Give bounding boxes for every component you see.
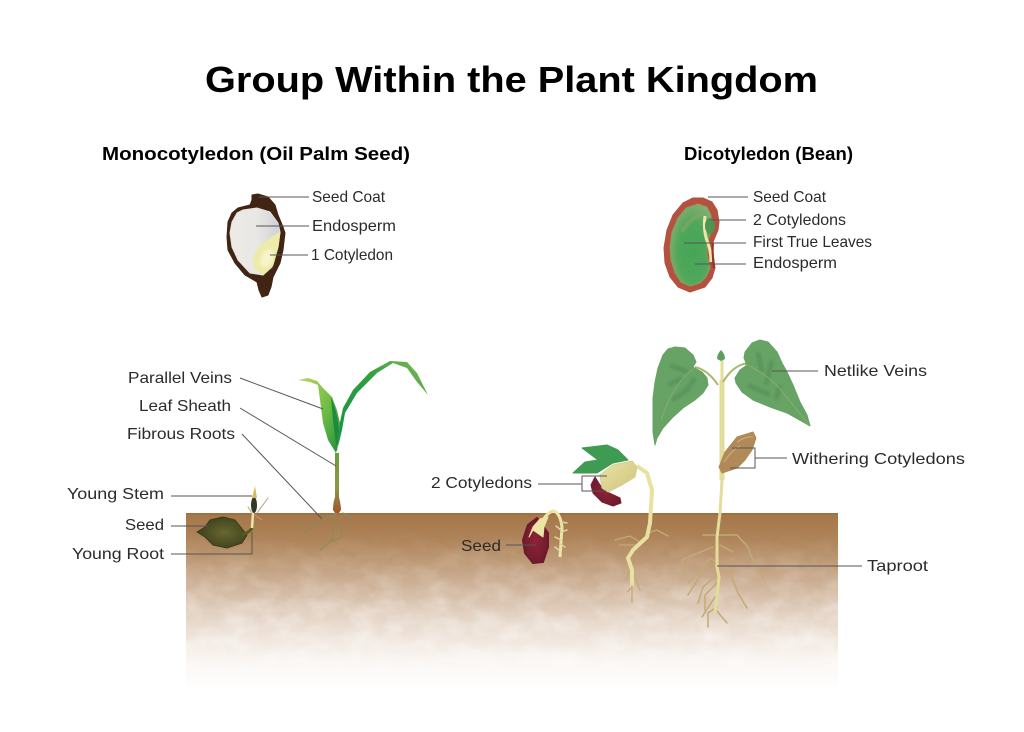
heading: monocotyledon: Monocotyledon (Oil Palm Seed) (102, 144, 410, 164)
labels: bean seed (684, 189, 872, 272)
labels: monocot seedling: Parallel Veins (128, 370, 232, 387)
labels: monocot germinating seed: Seed (125, 517, 164, 534)
labels: bean seed: Endosperm (753, 255, 837, 272)
icon: oil palm seed cross-section (227, 194, 285, 297)
labels: oil palm seed: Seed Coat (312, 189, 386, 206)
labels: monocot seedling: Leaf Sheath (139, 398, 231, 415)
labels: bean seed: First True Leaves (753, 234, 872, 251)
labels: oil palm seed: 1 Cotyledon (311, 247, 393, 264)
labels: bean seed: Seed Coat (753, 189, 827, 206)
soil ground (186, 513, 838, 690)
labels: germinating bean: Seed (461, 538, 501, 555)
labels: bean seedling (431, 475, 607, 492)
labels: germinating bean (461, 538, 536, 555)
labels: oil palm seed (256, 189, 396, 264)
labels: monocot germinating seed: Young Stem (67, 486, 164, 503)
icon: bean seed cross-section (664, 198, 719, 292)
labels: bean plant: Netlike Veins (824, 363, 927, 380)
title: Group Within the Plant Kingdom (205, 59, 818, 100)
labels: monocot germinating seed: Young Root (72, 546, 165, 563)
icon: bean plant (653, 340, 810, 627)
labels: bean plant: Withering Cotyledons (792, 451, 965, 468)
labels: bean plant (717, 363, 965, 575)
icon: monocot germinating seed (197, 486, 268, 548)
icon: bean seedling (573, 445, 668, 603)
labels: monocot germinating seed (67, 486, 252, 563)
labels: oil palm seed: Endosperm (312, 218, 396, 235)
labels: bean plant: Taproot (867, 558, 929, 575)
labels: bean seed: 2 Cotyledons (753, 212, 846, 229)
icon: monocot seedling (297, 361, 428, 550)
labels: monocot seedling (127, 370, 336, 519)
labels: bean seedling: 2 Cotyledons (431, 475, 532, 492)
icon: germinating bean (523, 511, 567, 563)
heading: dicotyledon: Dicotyledon (Bean) (684, 144, 853, 164)
labels: monocot seedling: Fibrous Roots (127, 426, 235, 443)
